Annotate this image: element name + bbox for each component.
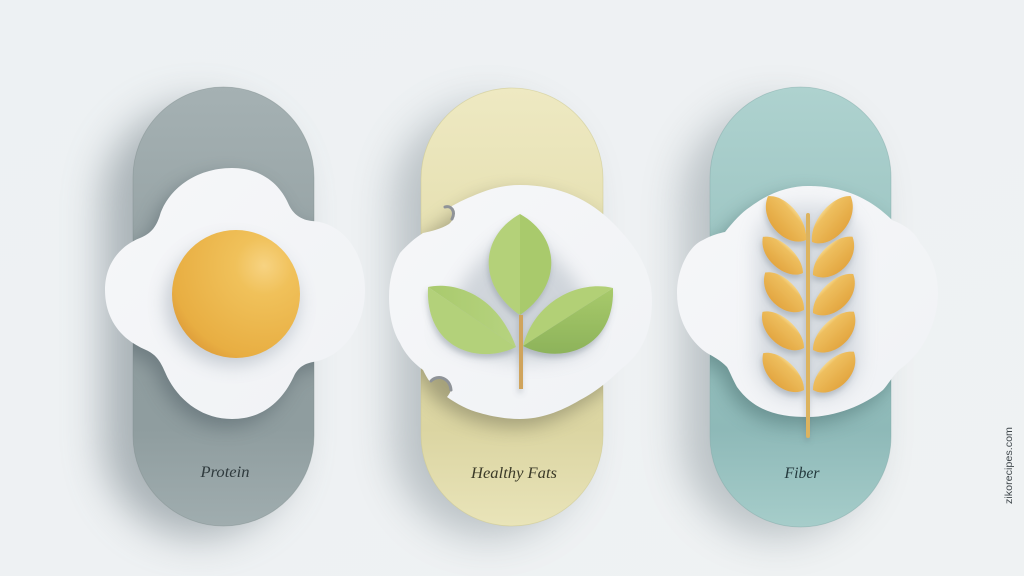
pill: healthy fats: [421, 88, 603, 526]
pill: protein: [133, 87, 314, 526]
panel: protein: [105, 86, 326, 526]
healthy fats plate: [389, 185, 652, 419]
icon: egg yolk: [172, 230, 300, 358]
icon: wheat: [753, 189, 865, 438]
panel: fiber: [677, 86, 902, 528]
plate notches: [431, 207, 453, 390]
label: protein: Protein: [199, 464, 250, 481]
label: fiber: Fiber: [784, 465, 820, 482]
egg white: [105, 168, 365, 419]
label: healthy fats: Healthy Fats: [470, 465, 557, 482]
fiber plate: [677, 186, 938, 417]
soft panel shadows: [103, 105, 872, 537]
watermark: zikorecipes.com: [1003, 427, 1015, 504]
icon: leaves: [428, 214, 613, 389]
pill: fiber: [710, 87, 891, 527]
panel: healthy fats: [389, 88, 614, 526]
